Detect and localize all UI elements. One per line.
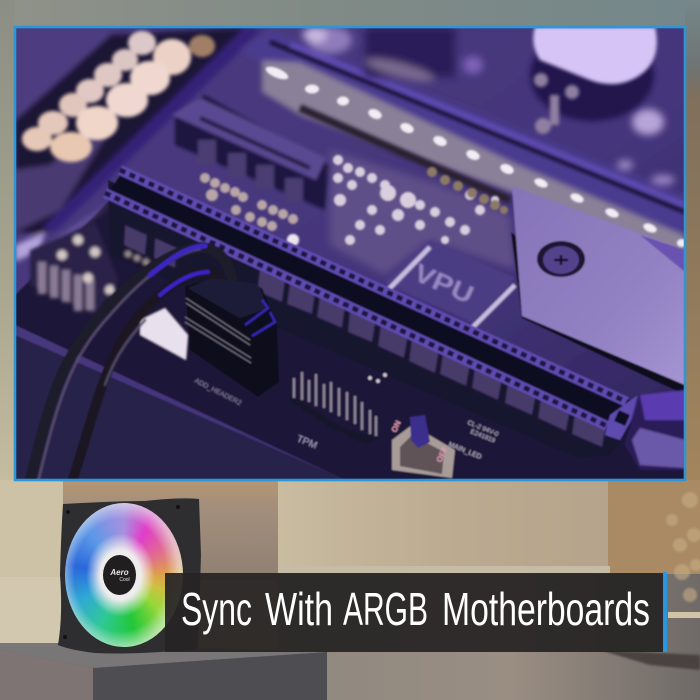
central components base [330, 150, 515, 275]
fan product image [58, 498, 201, 654]
caption text: ARGB [343, 583, 428, 635]
second blurred slot [172, 95, 330, 210]
header pins and TPM label [193, 372, 387, 452]
RGB fan ring [65, 503, 183, 647]
left pin block [30, 222, 150, 315]
LED switch: ON [390, 419, 403, 434]
caption blue accent [663, 572, 667, 652]
capacitor beads [22, 31, 215, 162]
header pins and TPM label: ADD_HEADER2 [193, 378, 242, 407]
photo blue border [15, 27, 685, 480]
board base [15, 27, 685, 480]
LED switch [390, 415, 500, 478]
caption bar [165, 573, 663, 652]
LED switch: E241819 [469, 428, 496, 445]
photo panel: motherboard close-up [14, 26, 686, 482]
ARGB connector plug [185, 278, 279, 397]
top right heatsink [511, 186, 685, 395]
cables [30, 246, 232, 482]
fan hub logo [103, 555, 136, 595]
upper expansion slot with silver strip [240, 30, 687, 255]
fan hub logo: Aero [110, 568, 129, 577]
VPU chip: VPU [410, 259, 478, 310]
coin capacitor [530, 27, 657, 134]
caption text: Sync [181, 583, 252, 635]
caption text [181, 583, 650, 635]
fan hub logo: Cool [119, 577, 130, 583]
board bead clusters [200, 173, 299, 246]
top blurred components [303, 26, 675, 185]
VPU chip [385, 240, 515, 328]
LED switch: OFF [435, 445, 450, 464]
right corner connector [625, 390, 685, 470]
screw [537, 241, 585, 277]
dark table surface [15, 335, 345, 480]
white header connector [140, 308, 188, 360]
caption text: With [265, 583, 333, 635]
fan white glow [65, 503, 183, 647]
top left heatsink [15, 27, 262, 262]
LED switch: CL-2 94V-0 [466, 419, 500, 438]
LED switch: MAIN_LED [447, 441, 482, 461]
board lower area [15, 190, 685, 480]
main PCIe slot [105, 170, 640, 458]
fan frame [58, 498, 201, 654]
header pins and TPM label: TPM [295, 434, 319, 452]
